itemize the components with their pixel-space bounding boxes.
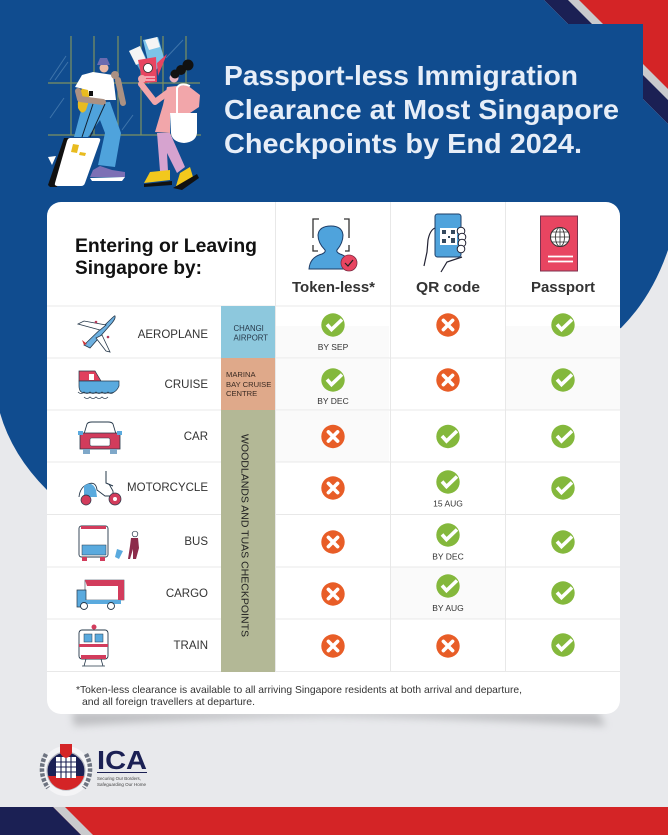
icon: train [79, 624, 108, 666]
column headings: Token-less* [292, 279, 375, 296]
checkpoint cell: Woodlands and Tuas: WOODLANDS AND TUAS CHECKPOINTS [238, 434, 250, 637]
top right corner stripes [544, 0, 668, 124]
subtle cell shading [276, 326, 620, 619]
tickets and passport [129, 46, 156, 84]
card shadow [72, 712, 606, 726]
status marks: QR code [432, 313, 464, 658]
checkpoint cell: Woodlands and Tuas [221, 410, 275, 672]
wordmark: ICA [97, 745, 147, 775]
icon: passport [540, 216, 578, 271]
column headings [292, 279, 595, 296]
icon: face scan [309, 219, 357, 271]
ICA logo: Safeguarding Our Home [97, 782, 146, 788]
mode labels: AEROPLANE [138, 329, 208, 341]
blue header background [0, 0, 668, 490]
checkpoint cell: Marina Bay Cruise Centre: CENTRE [226, 389, 257, 398]
bottom band [0, 807, 668, 835]
icon: motorcycle [79, 471, 121, 505]
mode labels: MOTORCYCLE [127, 482, 208, 494]
column headings: QR code [416, 279, 480, 296]
status marks: token-less: BY DEC [317, 396, 349, 406]
icon: bus and traveller [79, 526, 139, 561]
status marks: QR code: BY AUG [432, 603, 464, 613]
icon: aeroplane [78, 316, 115, 352]
window grid [48, 36, 201, 135]
status marks: token-less: BY SEP [318, 342, 349, 352]
mode labels [127, 329, 208, 652]
table rules [47, 202, 620, 672]
icon: cargo truck [77, 580, 124, 610]
icon: car [78, 422, 122, 454]
status marks: QR code: BY DEC [432, 552, 464, 562]
mode labels: TRAIN [174, 640, 208, 652]
checkpoint cell: Changi Airport: CHANGI [234, 324, 264, 333]
woman [157, 133, 185, 173]
status marks: QR code: 15 AUG [433, 498, 463, 508]
checkpoint cell: Marina Bay Cruise Centre: MARINA [226, 370, 256, 379]
table card [47, 202, 620, 714]
footnote: *Token-less clearance is available to all arriving Singapore residents at both arrival and departure, [76, 684, 522, 696]
heading: entering or leaving: Entering or Leaving [75, 235, 257, 257]
illustration: travellers [48, 36, 201, 190]
mode labels: CARGO [166, 588, 208, 600]
title: Checkpoints by End 2024. [224, 128, 582, 159]
footnote [76, 684, 522, 708]
emblem [41, 744, 91, 796]
ICA logo [41, 744, 147, 796]
status marks: token-less [317, 313, 349, 658]
mode labels: BUS [184, 536, 208, 548]
checkpoint cell: Marina Bay Cruise Centre [221, 358, 275, 410]
icon: phone with QR code [424, 214, 466, 272]
suitcase [48, 138, 70, 187]
heading: entering or leaving [75, 235, 257, 279]
mode labels: CRUISE [165, 379, 208, 391]
title: Passport-less Immigration [224, 60, 578, 91]
icon: cruise ship [78, 371, 119, 398]
heading: entering or leaving: Singapore by: [75, 257, 202, 279]
footnote: and all foreign travellers at departure. [82, 696, 255, 708]
title: Clearance at Most Singapore [224, 94, 619, 125]
ICA logo: Securing Our Borders, [97, 776, 141, 782]
checkpoint cell: Marina Bay Cruise Centre: BAY CRUISE [226, 380, 271, 389]
checkpoint cell: Changi Airport: AIRPORT [234, 334, 268, 342]
status marks: passport [551, 313, 575, 657]
title [224, 60, 619, 159]
column headings: Passport [531, 279, 595, 296]
checkpoint cell: Changi Airport [221, 306, 275, 358]
man [74, 102, 121, 167]
mode labels: CAR [184, 431, 208, 443]
